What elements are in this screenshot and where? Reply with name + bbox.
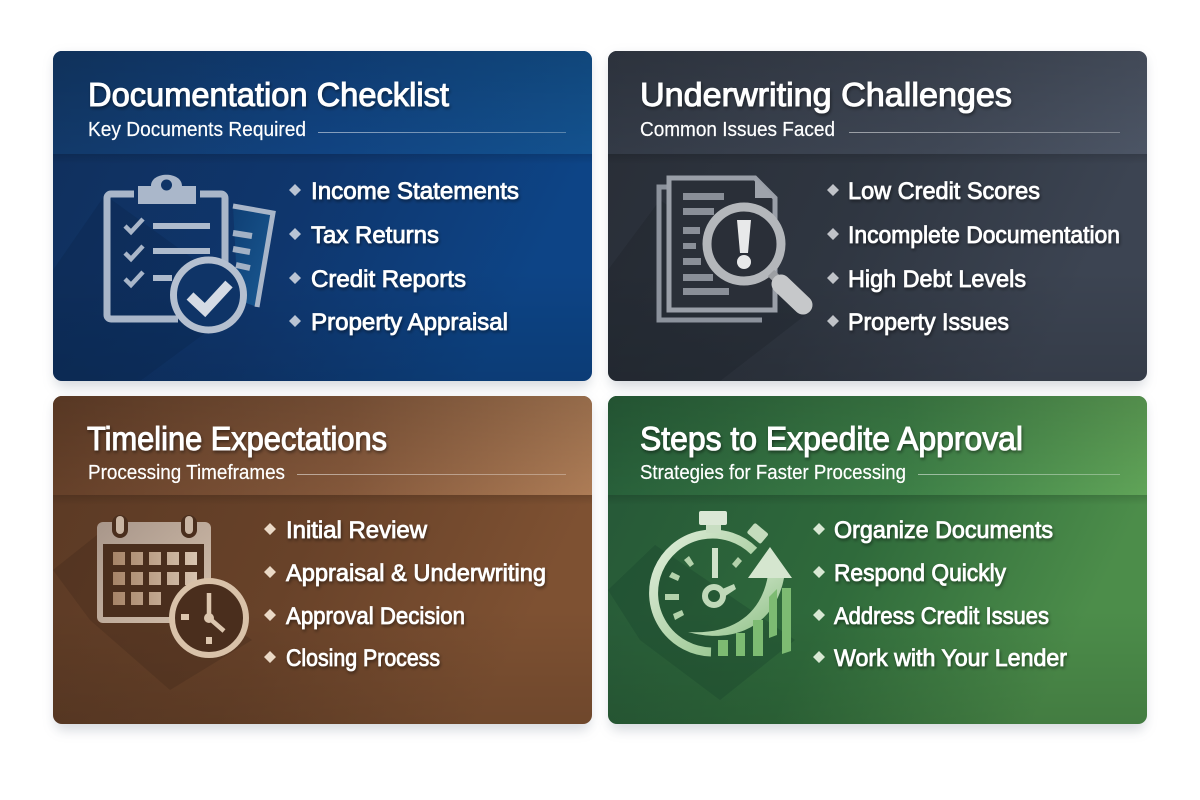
icon: clipboard with checkmark — [107, 175, 273, 330]
panel: timeline expectations — [53, 396, 592, 730]
list: timeframes — [264, 517, 546, 672]
list: strategies: Respond Quickly — [834, 560, 1006, 587]
list: timeframes: Initial Review — [286, 517, 428, 544]
list: documents: Income Statements — [311, 178, 519, 205]
list: documents: Tax Returns — [311, 222, 439, 249]
heading: underwriting challenges: Underwriting Challenges — [640, 76, 1012, 113]
list: issues: Property Issues — [848, 309, 1009, 336]
list: strategies — [813, 517, 1067, 672]
list: strategies: Address Credit Issues — [834, 603, 1049, 630]
heading: documentation checklist: Documentation Checklist — [88, 76, 449, 113]
panel: steps to expedite approval — [608, 396, 1147, 730]
icon: calendar with clock — [97, 515, 246, 655]
heading: steps to expedite approval: Steps to Expedite Approval — [640, 420, 1023, 457]
subheading: processing timeframes: Processing Timeframes — [88, 462, 285, 484]
list: timeframes: Appraisal & Underwriting — [286, 560, 546, 587]
heading: timeline expectations: Timeline Expectations — [87, 420, 387, 457]
panel: underwriting challenges — [608, 51, 1147, 387]
list: issues: High Debt Levels — [848, 266, 1026, 293]
list: strategies: Organize Documents — [834, 517, 1053, 544]
list: documents — [289, 178, 519, 336]
list: timeframes: Approval Decision — [286, 603, 465, 630]
icon: stopwatch with rising arrow — [654, 511, 792, 656]
list: strategies: Work with Your Lender — [834, 645, 1067, 672]
list: documents: Property Appraisal — [311, 309, 508, 336]
icon: document with magnifier — [659, 178, 803, 320]
list: issues — [827, 178, 1120, 336]
subheading: key documents required: Key Documents Required — [88, 119, 306, 141]
list: issues: Low Credit Scores — [848, 178, 1040, 205]
list: documents: Credit Reports — [311, 266, 466, 293]
subheading: strategies for faster processing: Strategies for Faster Processing — [640, 462, 906, 484]
panel: documentation checklist — [53, 51, 592, 387]
subheading: common issues faced: Common Issues Faced — [640, 119, 835, 141]
list: issues: Incomplete Documentation — [848, 222, 1120, 249]
list: timeframes: Closing Process — [286, 645, 440, 672]
